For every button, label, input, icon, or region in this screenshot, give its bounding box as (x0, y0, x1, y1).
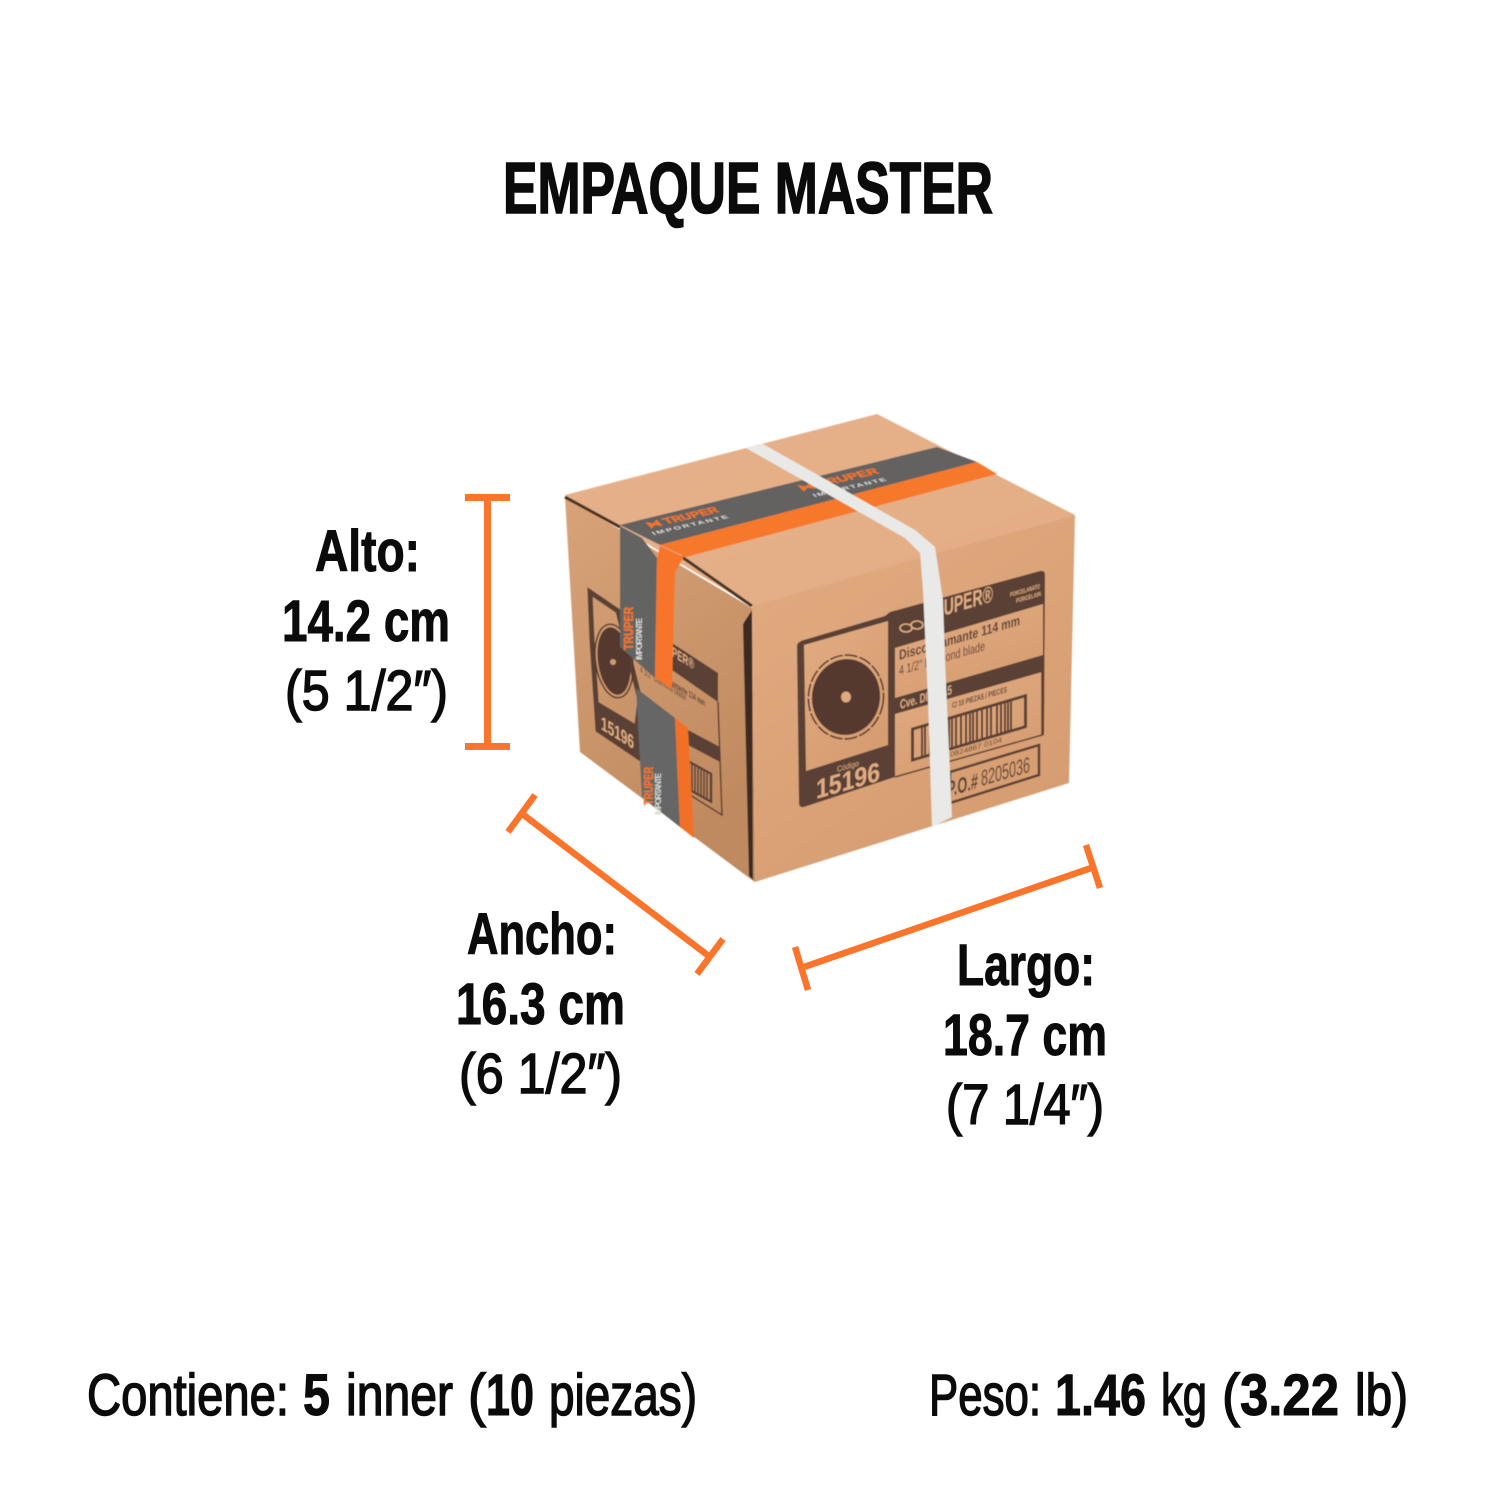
orange tape lower (675, 718, 694, 838)
label: largo: Largo: (957, 933, 1095, 998)
label: largo: 18.7 cm (943, 1003, 1107, 1068)
footer: contents: 10 (486, 1363, 534, 1428)
footer: weight (929, 1363, 1408, 1428)
footer: contents: 5 (303, 1363, 330, 1428)
right label: model code: Cve. DIDI-115 (900, 682, 952, 712)
right label: disc window (804, 621, 888, 771)
left face printed label (590, 592, 722, 815)
footer: contents: inner (346, 1363, 453, 1428)
footer: contents: Contiene: (87, 1363, 289, 1428)
left label: code block (595, 700, 638, 757)
tape brand upper: TRUPER (621, 607, 636, 650)
footer: weight: ( (1222, 1363, 1240, 1428)
box photo: cardboard master carton (565, 414, 1075, 882)
packing tape: top face (620, 447, 997, 557)
left label: product text english: 4 1/2" Diamond blade (640, 665, 686, 703)
top face (565, 414, 1075, 606)
footer: weight: 1.46 (1055, 1363, 1146, 1428)
label: ancho: (6 1/2″) (459, 1042, 622, 1106)
tape warning text repeated: IMPORTANTE (811, 477, 888, 498)
left label: barcode (689, 762, 711, 802)
gray tape lower (636, 688, 680, 827)
gray tape top (620, 447, 977, 545)
right label: PO number: P.O.# (947, 768, 978, 802)
right label: barcode digits: 0824867 0104 (950, 736, 1002, 759)
tape warning upper: IMPORTANTE (635, 617, 644, 660)
gray tape upper (620, 526, 657, 678)
right label: pieces: C/ 10 PIEZAS / PIECES (952, 685, 1007, 710)
white strap (746, 444, 952, 827)
right label: lower outline (895, 672, 1042, 777)
right label: PO number (947, 752, 1030, 802)
label: ancho (456, 902, 625, 1106)
right label: product window (895, 604, 1043, 698)
dimension bar: ancho (508, 795, 723, 974)
right label: product name: Disco Diamante 114 mm (899, 613, 1020, 664)
label: largo (943, 933, 1107, 1137)
right face printed label (797, 571, 1045, 807)
right label: corner note: PORCELANATO (1010, 583, 1040, 599)
tape warning lower: IMPORTANTE (654, 772, 663, 815)
footer: weight: Peso: (929, 1363, 1041, 1428)
orange tape upper (655, 546, 684, 689)
left label: outer panel (590, 592, 640, 757)
right label: logo mark (900, 621, 923, 632)
label: ancho: Ancho: (467, 902, 617, 967)
left label: outline (690, 702, 722, 815)
left label: code number: 15196 (601, 713, 634, 754)
tape brand text: ⧓ TRUPER (643, 505, 722, 530)
footer: contents: ( (468, 1363, 486, 1428)
right label: blade disc (803, 650, 889, 744)
footer: weight: 3.22 (1240, 1363, 1339, 1428)
right label: corner note 2: PORCELAIN (1016, 591, 1041, 605)
left label: blade disc (591, 622, 637, 700)
right label: PO number: 8205036 (981, 752, 1030, 791)
right label: code number: 15196 (816, 756, 880, 805)
footer: contents: piezas) (549, 1363, 697, 1428)
right label: lower area (895, 672, 1042, 777)
right label: barcode (912, 696, 1026, 760)
orange tape top (660, 462, 997, 557)
label: ancho: 16.3 cm (456, 972, 625, 1037)
tape warning text: IMPORTANTE (650, 514, 730, 536)
right label: PO box (950, 745, 1039, 803)
packing tape: left face (620, 526, 694, 838)
right face (752, 515, 1075, 882)
left face printed label: amante 114 mm (672, 679, 705, 709)
left label: brand name: PER® (672, 644, 694, 674)
footer: weight: lb) (1355, 1363, 1408, 1428)
footer: weight: kg (1161, 1363, 1207, 1428)
label: alto: (5 1/2″) (285, 659, 448, 723)
dimension bar: alto (465, 494, 510, 750)
title: EMPAQUE MASTER (503, 149, 993, 229)
right label: brand name: TRUPER® (925, 581, 993, 626)
left label: dark band (688, 730, 720, 762)
left face (565, 497, 755, 882)
right label: dark panel (797, 571, 1045, 807)
tape brand text repeated: ⧓ TRUPER (795, 466, 882, 493)
flap seams (565, 497, 753, 880)
label: largo: (7 1/4″) (946, 1073, 1104, 1137)
footer: contents (87, 1363, 697, 1428)
label: alto (282, 519, 450, 723)
tape brand lower: TRUPER (641, 767, 656, 805)
label: alto: 14.2 cm (282, 589, 450, 654)
label: alto: Alto: (315, 519, 420, 584)
right label: code caption: Código (837, 759, 859, 774)
dimension bar: largo (795, 845, 1100, 990)
right label: product name english: 4 1/2" Diamond blade (899, 638, 985, 678)
left label: brand band (672, 643, 718, 702)
